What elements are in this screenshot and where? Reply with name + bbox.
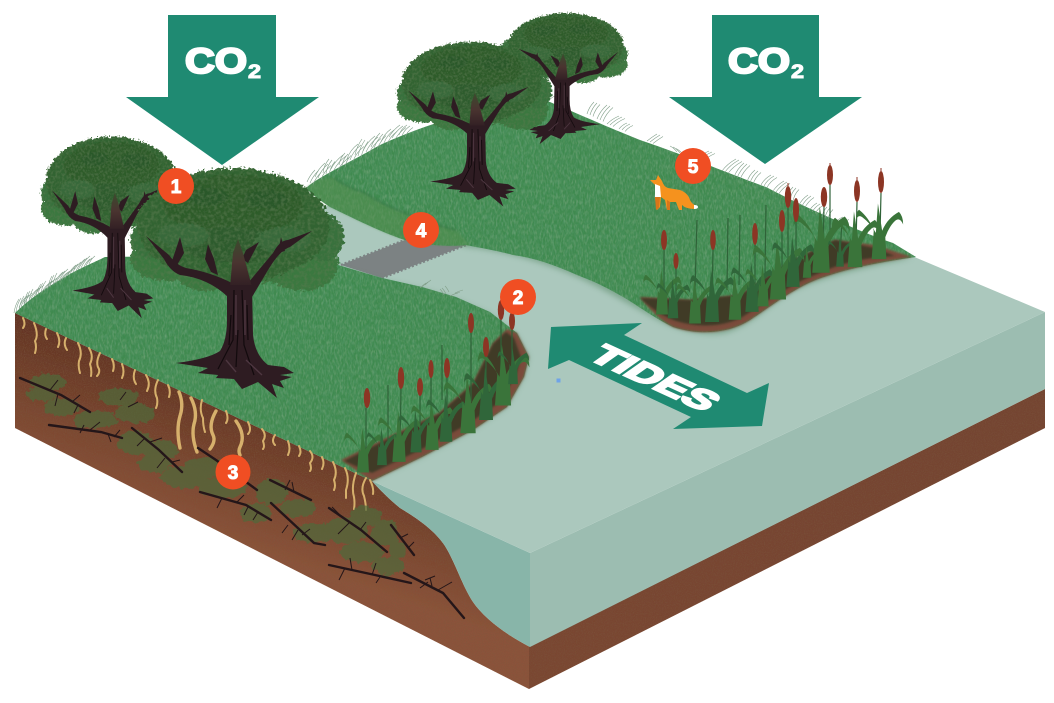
arrow: CO2 entering left: 2: [248, 62, 261, 83]
fox: [650, 175, 698, 210]
grass fringe: front field: [14, 256, 463, 313]
arrow: CO2 entering left: CO: [185, 42, 247, 81]
badge 2: 2: [513, 288, 523, 309]
tree 2: large front tree: [130, 168, 344, 398]
back marsh hill: [306, 92, 916, 334]
badge 4: 4: [416, 221, 427, 242]
arrow: CO2 entering right: [669, 15, 862, 164]
concrete crossing: [341, 240, 466, 278]
stray marker: [556, 378, 560, 382]
badge 4: [403, 212, 439, 248]
water: left side face: [372, 481, 530, 647]
tides arrow: [548, 323, 769, 429]
arrow: CO2 entering right: CO: [728, 42, 790, 81]
tree 4: far right back tree: [499, 13, 628, 144]
soil cross-section: [15, 313, 1045, 689]
reeds: left bank: [344, 300, 529, 473]
badge 2: [500, 279, 536, 315]
tree 1: left tree: [41, 136, 188, 318]
badge 1: [158, 168, 194, 204]
water: top surface channel: [320, 205, 1045, 553]
arrow: CO2 entering right: 2: [791, 62, 804, 83]
badge 1: 1: [171, 177, 182, 198]
soil right face: [529, 389, 1045, 689]
grass fringe: back hill: [307, 93, 849, 226]
tides arrow: TIDES: [579, 340, 729, 417]
water: right side face: [530, 312, 1045, 647]
tree 3: back hill tree: [397, 42, 552, 206]
reeds: right bank: [643, 163, 903, 324]
badge 3: 3: [228, 463, 238, 484]
front marsh with grass: [14, 255, 529, 481]
muddy bank behind left reeds: [341, 329, 529, 481]
badge 5: 5: [688, 157, 699, 178]
badge 3: [216, 454, 250, 490]
tree roots in soil: [23, 318, 373, 510]
buried plant matter and carbon in soil: [20, 374, 464, 618]
badge 5: [675, 148, 711, 184]
muddy bank behind right reeds: [640, 240, 912, 332]
arrow: CO2 entering left: [126, 15, 319, 165]
